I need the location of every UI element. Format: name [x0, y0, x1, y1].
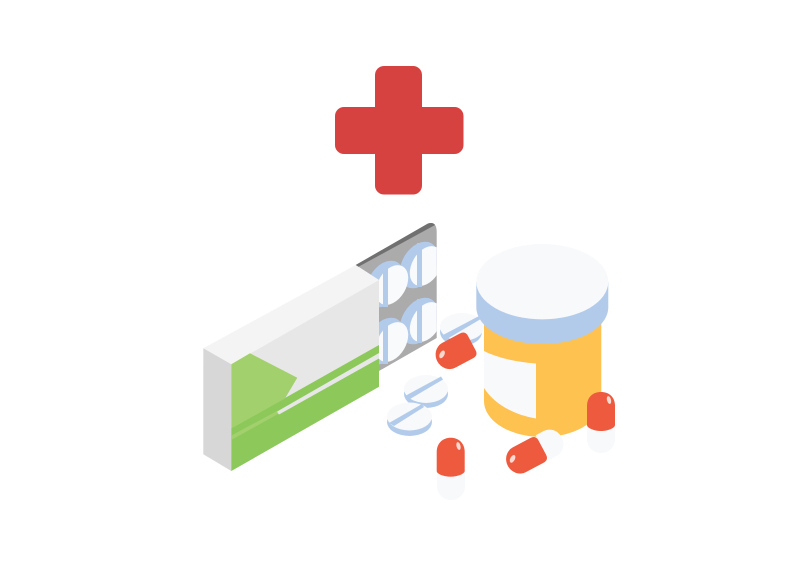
flat pill behind capsule: [440, 313, 484, 346]
box side face: [203, 348, 231, 471]
bottle cap side: [476, 282, 608, 344]
blister pack: [356, 223, 437, 371]
capsule right: [587, 392, 615, 453]
green arrow label: [231, 353, 297, 428]
light stripe: [277, 353, 379, 414]
capsule lower centre: [501, 425, 568, 478]
box top face: [203, 265, 379, 364]
icon: red cross: [335, 66, 464, 194]
flat pill lower: [387, 402, 432, 436]
tablet: top right: [400, 242, 437, 288]
green lower band: [231, 345, 379, 471]
tablet: bottom right: [400, 298, 437, 344]
pill bottle: [476, 244, 608, 437]
red half: [501, 435, 549, 478]
medicine box: [203, 265, 379, 471]
bottle label: [484, 351, 536, 418]
white half: [536, 425, 568, 460]
capsule upper left: [431, 331, 478, 374]
tablet: top left: [371, 260, 408, 308]
bottle body: [484, 320, 601, 437]
box front face: [231, 280, 379, 471]
capsule lower left: [437, 438, 465, 500]
flat pill upper: [404, 375, 448, 408]
bottle cap top: [476, 244, 608, 319]
tablet: bottom left: [379, 318, 408, 364]
